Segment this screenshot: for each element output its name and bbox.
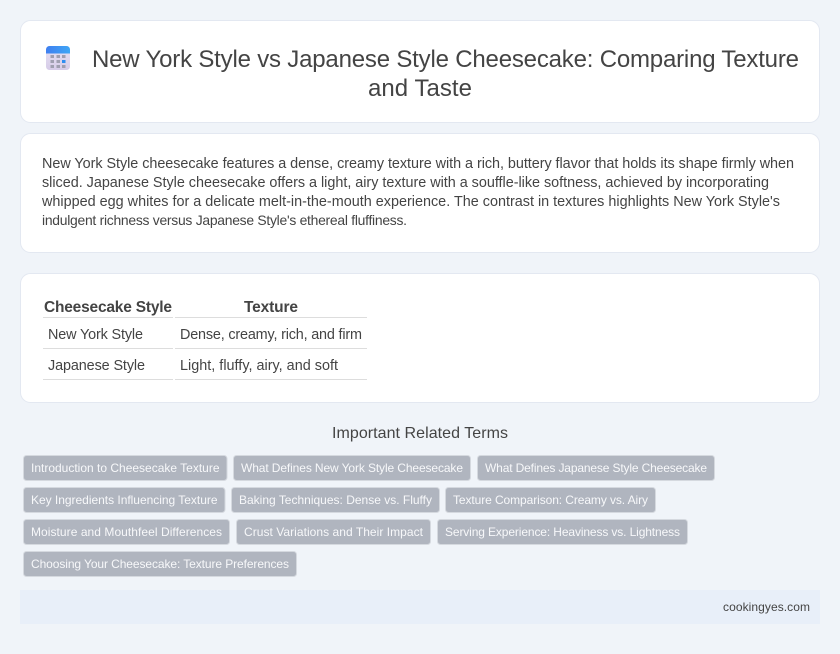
text block: description	[41, 156, 794, 228]
table row: New York Style: Dense, creamy, rich, and firm	[180, 327, 362, 343]
related term tags	[24, 456, 714, 576]
tag	[24, 552, 296, 576]
table row: New York Style	[43, 327, 367, 349]
tag	[234, 456, 470, 480]
text block: description: indulgent richness versus Japanese Style's ethereal fluffiness.	[42, 212, 407, 228]
footer source text: cookingyes.com	[723, 600, 810, 614]
tag	[24, 520, 230, 544]
table row: Japanese Style: Japanese Style	[48, 358, 145, 374]
tag: Texture Comparison: Creamy vs. Airy	[453, 493, 648, 507]
table row: Japanese Style	[43, 358, 367, 380]
tag	[236, 520, 430, 544]
title: New York Style vs Japanese Style Cheesecake: Comparing Texture	[92, 46, 799, 73]
tag	[232, 488, 440, 512]
tag	[478, 456, 714, 480]
tag	[24, 456, 227, 480]
tag: What Defines Japanese Style Cheesecake	[485, 461, 707, 475]
table header: Cheesecake Style	[44, 299, 172, 316]
tag: What Defines New York Style Cheesecake	[241, 461, 463, 475]
text block: description: sliced. Japanese Style cheesecake offers a light, airy texture with a souffle-like softness, achieved by incorporating	[42, 175, 769, 191]
text block: description: whipped egg whites for a delicate melt-in-the-mouth experience. The contrast in textures highlights New York Style's	[41, 194, 780, 210]
tag	[446, 488, 656, 512]
panel: title header	[20, 20, 820, 122]
tag: Key Ingredients Influencing Texture	[31, 493, 218, 507]
tag: Crust Variations and Their Impact	[244, 525, 424, 539]
footer	[20, 590, 820, 624]
panel: comparison table	[20, 274, 820, 402]
tag: Serving Experience: Heaviness vs. Lightness	[445, 525, 680, 539]
panel: description	[20, 134, 820, 252]
heading: related terms: Important Related Terms	[332, 425, 508, 442]
tag	[24, 488, 225, 512]
tag: Choosing Your Cheesecake: Texture Preferences	[31, 557, 289, 571]
table row: Japanese Style: Light, fluffy, airy, and soft	[180, 358, 338, 374]
tag	[438, 520, 688, 544]
table header: Texture	[244, 299, 298, 316]
tag: Moisture and Mouthfeel Differences	[31, 525, 222, 539]
title: and Taste	[368, 75, 472, 102]
icon: calendar	[46, 46, 70, 70]
table row: New York Style: New York Style	[48, 327, 143, 343]
text block: description: New York Style cheesecake features a dense, creamy texture with a rich, buttery flavor that holds its shape firmly when	[42, 156, 794, 172]
title	[92, 46, 799, 102]
tag: Baking Techniques: Dense vs. Fluffy	[239, 493, 432, 507]
table header	[43, 299, 367, 318]
tag: Introduction to Cheesecake Texture	[31, 461, 220, 475]
